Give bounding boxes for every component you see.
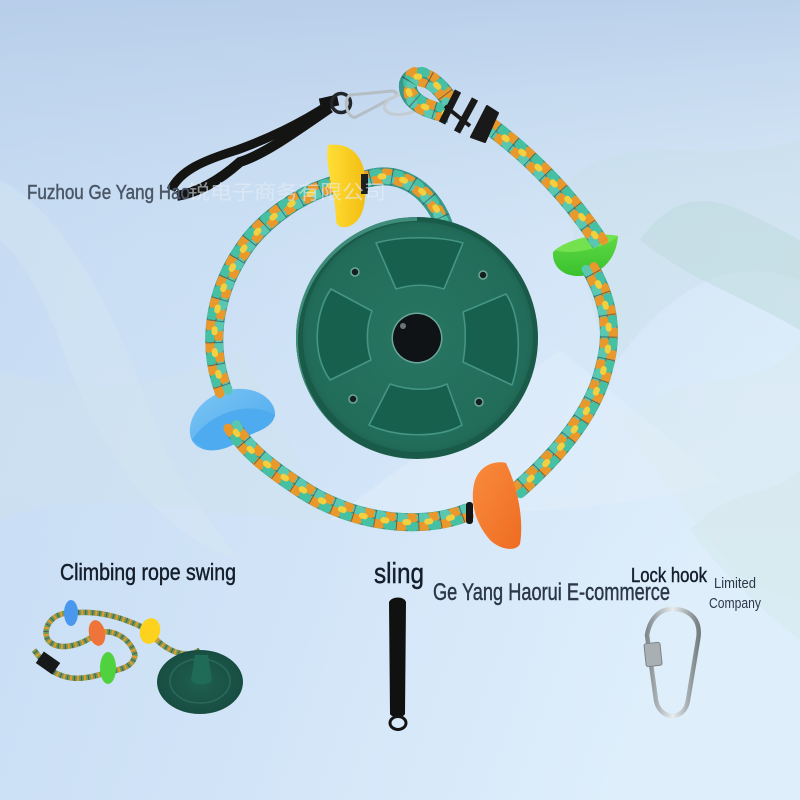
green climbing hold [553,235,618,276]
black rope clamp [442,91,498,142]
watermark: Company: Company [709,595,761,612]
product: small swing with rope [34,600,243,714]
watermark: Limited: Limited [714,575,756,592]
title: lock hook: Lock hook [631,565,708,587]
rope ring [210,71,613,527]
orange climbing hold [466,462,521,549]
title: climbing rope swing: Climbing rope swing [60,559,236,585]
product: lock hook carabiner [644,609,699,716]
watermark: company name, Latin part: Fuzhou Ge Yang Hao [27,182,190,204]
title: sling: sling [374,558,424,590]
watermark: Ge Yang Haorui E-commerce: Ge Yang Haorui E-commerce [433,579,670,606]
sling strap on ring [171,94,350,196]
product: sling strap [389,598,406,730]
yellow climbing hold [327,145,368,227]
seat disc [296,217,538,459]
watermark: company name, Chinese part: 锐电子商务有限公司 [188,181,386,204]
seat disc center knob [393,314,441,362]
carabiner on ring [346,90,426,118]
blue climbing hold [190,389,275,450]
